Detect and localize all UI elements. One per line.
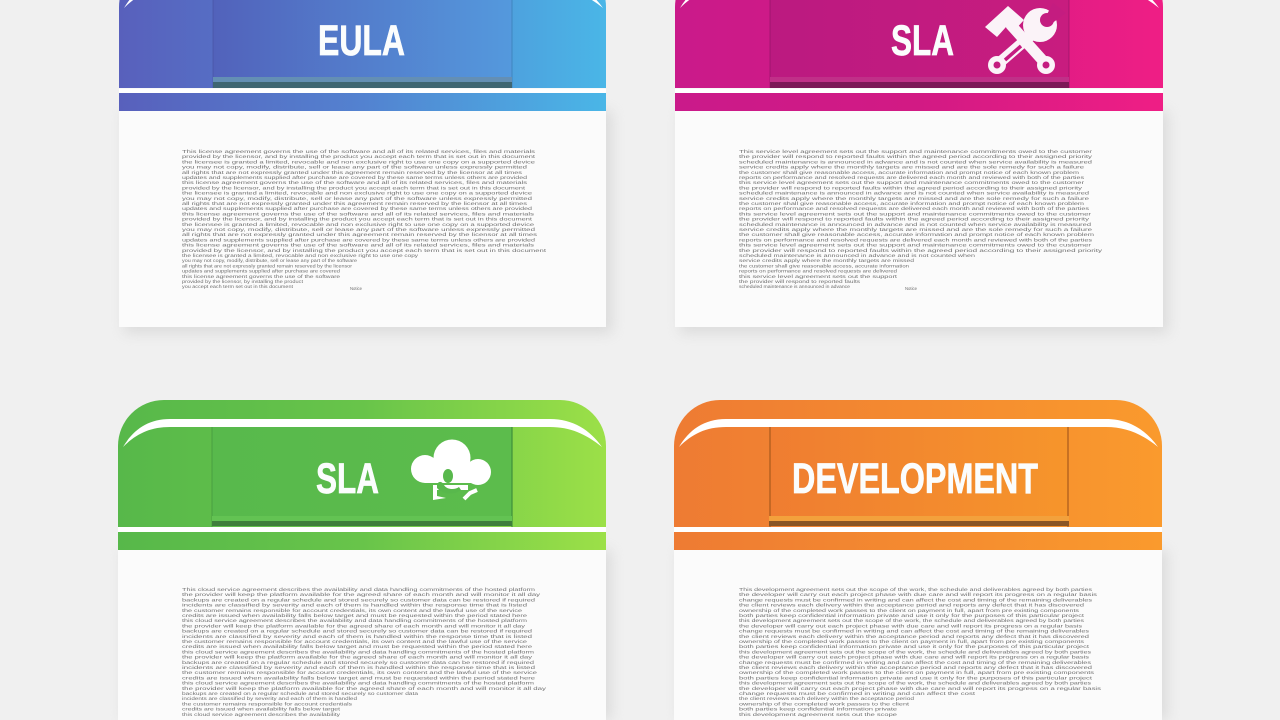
title plate (769, 427, 1069, 527)
text block: SLA terms: scheduled maintenance is announced in advance (739, 284, 851, 289)
text block: SLA terms: scheduled maintenance is announced in advance and is not counted when service availability is measured (739, 159, 1093, 164)
text block: EULA terms: provided by the licensor, and by installing the product you accept each term that is set out in this document (182, 185, 527, 190)
text block: EULA terms: all rights that are not expressly granted under this agreement remain reserved by the licensor at all times (182, 201, 527, 206)
text block: SLA terms: scheduled maintenance is announced in advance and is not counted when (739, 253, 976, 258)
title plate (769, 0, 1070, 88)
text block: EULA terms: the licensee is granted a limited, revocable and non exclusive right to use one copy (182, 253, 419, 258)
title: SLA: SLA (891, 17, 954, 65)
text block: SLA terms: service credits apply where the monthly targets are missed and are the sole remedy for such a failure (739, 196, 1090, 201)
panel: SLA cloud card (118, 400, 611, 720)
text block: SLA cloud terms: the customer remains responsible for account credentials, its own content and the lawful use of the service (182, 608, 523, 613)
card body (675, 111, 1163, 327)
text block: SLA cloud terms: the provider will keep the platform available for the agreed share of each month and will monitor it all day (182, 592, 542, 597)
text block: SLA cloud terms: This cloud service agreement describes the availability and data handling commitments of the hosted platform (182, 587, 536, 592)
text block: SLA cloud terms: backups are created on a regular schedule and stored securely so customer data (182, 691, 419, 696)
text block: EULA terms: this license agreement governs the use of the software and all of its related services, files and materials (182, 180, 527, 185)
text block: development terms: this development agreement sets out the scope of the work, the schedule and deliverables agreed by both parties (739, 618, 1084, 623)
header tab (118, 400, 606, 527)
text block: development terms: This development agreement sets out the scope of the work, the schedule and deliverables agreed by both parties (739, 587, 1092, 592)
text block: EULA terms: updates and supplements supplied after purchase are covered (182, 269, 341, 274)
text block: SLA terms: service credits apply where the monthly targets are missed (739, 258, 915, 263)
text block: SLA terms: This service level agreement sets out the support and maintenance commitments owed to the customer (739, 149, 1093, 154)
white stripe (674, 527, 1162, 532)
text block: EULA terms: this license agreement governs the use of the software and all of its related services, files and materials (182, 243, 534, 248)
text block: development terms: this development agreement sets out the scope of the work, the schedule and deliverables agreed by both parties (739, 649, 1091, 654)
panel: DEVELOPMENT card (674, 400, 1167, 720)
text block: EULA terms: updates and supplements supplied after purchase are covered by these same terms unless others are provided (182, 175, 528, 180)
text block: EULA terms: this license agreement governs the use of the software (182, 274, 341, 279)
text block: EULA terms: all rights that are not expressly granted under this agreement remain reserved by the licensor at all times (182, 170, 522, 175)
text block: SLA terms: reports on performance and resolved requests are delivered each month and reviewed with both of the parties (739, 206, 1089, 211)
header arc highlight (679, 419, 1158, 447)
card body (674, 550, 1162, 720)
card body (118, 550, 606, 720)
text block: development terms: ownership of the completed work passes to the client (739, 701, 911, 706)
text block: SLA terms: scheduled maintenance is announced in advance and is not counted when service availability is measured (739, 191, 1090, 196)
text block: SLA terms: the customer shall give reasonable access, accurate information and prompt notice of each known problem (739, 201, 1085, 206)
header tab (675, 0, 1163, 88)
text block: EULA terms: you accept each term set out in this document (182, 284, 294, 289)
colour band (118, 532, 606, 550)
text block: development terms: both parties keep confidential information private and use it only for the purposes of this particular project (739, 644, 1091, 649)
text block: EULA terms: you may not copy, modify, distribute, sell or lease any part of the software unless expressly permitted (182, 165, 528, 170)
icon: cloud with gear (411, 440, 491, 500)
title plate (211, 427, 513, 527)
colour band (674, 532, 1162, 550)
text block: SLA terms: the provider will respond to reported faults within the agreed period according to their assigned priority (739, 248, 1104, 253)
text block: SLA terms: service credits apply where the monthly targets are missed and are the sole remedy for such a failure (739, 165, 1085, 170)
card body (119, 111, 606, 327)
text block: SLA terms: scheduled maintenance is announced in advance and is not counted when service availability is measured (739, 222, 1092, 227)
text block: development terms: change requests must be confirmed in writing and can affect the cost (739, 691, 977, 696)
text block: EULA terms: Notice (350, 286, 363, 291)
text block: SLA cloud terms: the provider will keep the platform available for the agreed share of each month and will monitor it all day (182, 623, 527, 628)
text block: SLA cloud terms (182, 587, 548, 717)
text block: development terms: this development agreement sets out the scope (739, 712, 898, 717)
text block: SLA terms: this service level agreement sets out the support and maintenance commitments owed to the customer (739, 243, 1092, 248)
text block: EULA terms: you may not copy, modify, distribute, sell or lease any part of the software (182, 258, 358, 263)
text block: SLA cloud terms: the provider will keep the platform available for the agreed share of each month and will monitor it all day (182, 655, 534, 660)
text block: SLA cloud terms: credits are issued when availability falls below target (182, 707, 341, 712)
text block: SLA terms: the provider will respond to reported faults within the agreed period according to their assigned priority (739, 217, 1091, 222)
text block: SLA cloud terms: credits are issued when availability falls below target and must be requested within the period stated here (182, 644, 533, 649)
text block: SLA terms: the provider will respond to reported faults within the agreed period according to their assigned priority (739, 185, 1084, 190)
text block: development terms: the developer will carry out each project phase with due care and will report its progress on a regular basis (739, 623, 1082, 628)
title plate (212, 0, 513, 88)
text block: development terms: the developer will carry out each project phase with due care and will report its progress on a regular basis (739, 686, 1101, 691)
text block: SLA cloud terms: incidents are classified by severity and each of them is handled within the response time that is listed (182, 603, 528, 608)
text block: EULA terms: you may not copy, modify, distribute, sell or lease any part of the software unless expressly permitted (182, 196, 533, 201)
text block: EULA terms: the licensee is granted a limited, revocable and non exclusive right to use one copy on a supported device (182, 159, 536, 164)
icon: crossed hammer and wrench (985, 3, 1066, 74)
text block: SLA cloud terms: this cloud service agreement describes the availability and data handling commitments of the hosted platform (182, 649, 535, 654)
panel: EULA card (119, 0, 612, 333)
text block: SLA terms: the customer shall give reasonable access, accurate information and prompt notice of each known problem (739, 232, 1095, 237)
text block: EULA terms: all rights that are not expressly granted remain reserved by the licensor (182, 263, 353, 268)
text block: development terms: both parties keep confidential information private and use it only for the purposes of this particular project (739, 675, 1094, 680)
text block: EULA terms: the licensee is granted a limited, revocable and non exclusive right to use one copy on a supported device (182, 222, 535, 227)
text block: SLA terms: this service level agreement sets out the support and maintenance commitments owed to the customer (739, 180, 1085, 185)
text block: SLA cloud terms: this cloud service agreement describes the availability and data handling commitments of the hosted platform (182, 618, 528, 623)
text block: development terms: ownership of the completed work passes to the client on payment in full, apart from pre existing components (739, 670, 1094, 675)
text block: development terms: change requests must be confirmed in writing and can affect the cost and timing of the remaining deliverables (739, 597, 1092, 602)
text block: EULA terms: you may not copy, modify, distribute, sell or lease any part of the software unless expressly permitted (182, 227, 536, 232)
text block: SLA cloud terms: backups are created on a regular schedule and stored securely so customer data can be restored if required (182, 660, 535, 665)
text block: development terms: both parties keep confidential information private and use it only for the purposes of this particular project (739, 613, 1086, 618)
header tab (674, 400, 1162, 527)
title: DEVELOPMENT: DEVELOPMENT (792, 455, 1038, 503)
text block: SLA cloud terms: incidents are classified by severity and each of them is handled (182, 696, 358, 701)
text block: development terms: the developer will carry out each project phase with due care and will report its progress on a regular basis (739, 655, 1089, 660)
text block: development terms: the client reviews each delivery within the acceptance period and reports any defect that it has discovered (739, 603, 1085, 608)
title: EULA: EULA (318, 17, 405, 65)
text block: SLA cloud terms: the customer remains responsible for account credentials, its own content and the lawful use of the service (182, 639, 528, 644)
text block: development terms (739, 587, 1101, 717)
white stripe (118, 527, 606, 532)
text block: SLA cloud terms: backups are created on a regular schedule and stored securely so customer data can be restored if required (182, 629, 533, 634)
text block: development terms: the client reviews each delivery within the acceptance period and reports any defect that it has discovered (739, 634, 1090, 639)
text block: SLA terms: the provider will respond to reported faults within the agreed period according to their assigned priority (739, 154, 1094, 159)
header tab (119, 0, 606, 88)
header arc highlight (124, 0, 603, 8)
text block: SLA terms: the customer shall give reasonable access, accurate information and prompt notice of each known problem (739, 170, 1080, 175)
text block: SLA terms: this service level agreement sets out the support and maintenance commitments owed to the customer (739, 211, 1092, 216)
header arc highlight (680, 0, 1159, 8)
text block: SLA cloud terms: the provider will keep the platform available for the agreed share of each month and will monitor it all day (182, 686, 548, 691)
text block: SLA terms: the provider will respond to reported faults (739, 279, 860, 284)
text block: SLA terms: the customer shall give reasonable access, accurate information (739, 263, 910, 268)
text block: EULA terms: provided by the licensor, and by installing the product you accept each term that is set out in this document (182, 217, 534, 222)
text block: SLA cloud terms: backups are created on a regular schedule and stored securely so customer data can be restored if required (182, 597, 536, 602)
text block: SLA cloud terms: credits are issued when availability falls below target and must be requested within the period stated here (182, 675, 536, 680)
text block: SLA cloud terms: the customer remains responsible for account credentials (182, 701, 352, 706)
white stripe (119, 88, 606, 93)
text block: SLA cloud terms: incidents are classified by severity and each of them is handled within the response time that is listed (182, 634, 533, 639)
text block: EULA terms: updates and supplements supplied after purchase are covered by these same terms unless others are provided (182, 206, 533, 211)
text block: EULA terms (182, 149, 548, 291)
text block: development terms: change requests must be confirmed in writing and can affect the cost and timing of the remaining deliverables (739, 660, 1091, 665)
text block: SLA cloud terms: this cloud service agreement describes the availability (182, 712, 342, 717)
title: SLA: SLA (316, 455, 379, 503)
text block: development terms: the developer will carry out each project phase with due care and will report its progress on a regular basis (739, 592, 1097, 597)
text block: EULA terms: updates and supplements supplied after purchase are covered by these same terms unless others are provided (182, 237, 536, 242)
text block: EULA terms: this license agreement governs the use of the software and all of its related services, files and materials (182, 211, 534, 216)
text block: development terms: change requests must be confirmed in writing and can affect the cost and timing of the remaining deliverables (739, 629, 1089, 634)
text block: SLA terms (739, 149, 1104, 291)
text block: development terms: ownership of the completed work passes to the client on payment in full, apart from pre existing components (739, 608, 1079, 613)
panel: SLA tools card (675, 0, 1168, 333)
text block: EULA terms: the licensee is granted a limited, revocable and non exclusive right to use one copy on a supported device (182, 191, 533, 196)
text block: EULA terms: provided by the licensor, by installing the product (182, 279, 304, 284)
colour band (119, 93, 606, 111)
text block: SLA terms: Notice (905, 286, 918, 291)
text block: EULA terms: This license agreement governs the use of the software and all of its related services, files and materials (182, 149, 535, 154)
text block: SLA terms: reports on performance and resolved requests are delivered (739, 269, 898, 274)
text block: SLA cloud terms: credits are issued when availability falls below target and must be requested within the period stated here (182, 613, 528, 618)
text block: SLA terms: service credits apply where the monthly targets are missed and are the sole remedy for such a failure (739, 227, 1093, 232)
text block: SLA terms: reports on performance and resolved requests are delivered each month and reviewed with both of the parties (739, 237, 1092, 242)
text block: development terms: the client reviews each delivery within the acceptance period and reports any defect that it has discovered (739, 665, 1093, 670)
white stripe (675, 88, 1163, 93)
text block: SLA terms: this service level agreement sets out the support (739, 274, 899, 279)
text block: SLA cloud terms: this cloud service agreement describes the availability and data handling commitments of the hosted platform (182, 681, 535, 686)
text block: development terms: this development agreement sets out the scope of the work, the schedule and deliverables agreed by both parties (739, 681, 1091, 686)
header arc highlight (123, 419, 602, 447)
text block: SLA cloud terms: the customer remains responsible for account credentials, its own content and the lawful use of the service (182, 670, 538, 675)
colour band (675, 93, 1163, 111)
text block: development terms: ownership of the completed work passes to the client on payment in full, apart from pre existing components (739, 639, 1084, 644)
text block: EULA terms: all rights that are not expressly granted under this agreement remain reserved by the licensor at all times (182, 232, 537, 237)
text block: SLA terms: reports on performance and resolved requests are delivered each month and reviewed with both of the parties (739, 175, 1084, 180)
text block: development terms: both parties keep confidential information private (739, 707, 898, 712)
text block: SLA cloud terms: incidents are classified by severity and each of them is handled within the response time that is listed (182, 665, 536, 670)
text block: development terms: the client reviews each delivery within the acceptance period (739, 696, 915, 701)
text block: EULA terms: provided by the licensor, and by installing the product you accept each term that is set out in this document (182, 154, 537, 159)
text block: EULA terms: provided by the licensor, and by installing the product you accept each term that is set out in this document (182, 248, 548, 253)
